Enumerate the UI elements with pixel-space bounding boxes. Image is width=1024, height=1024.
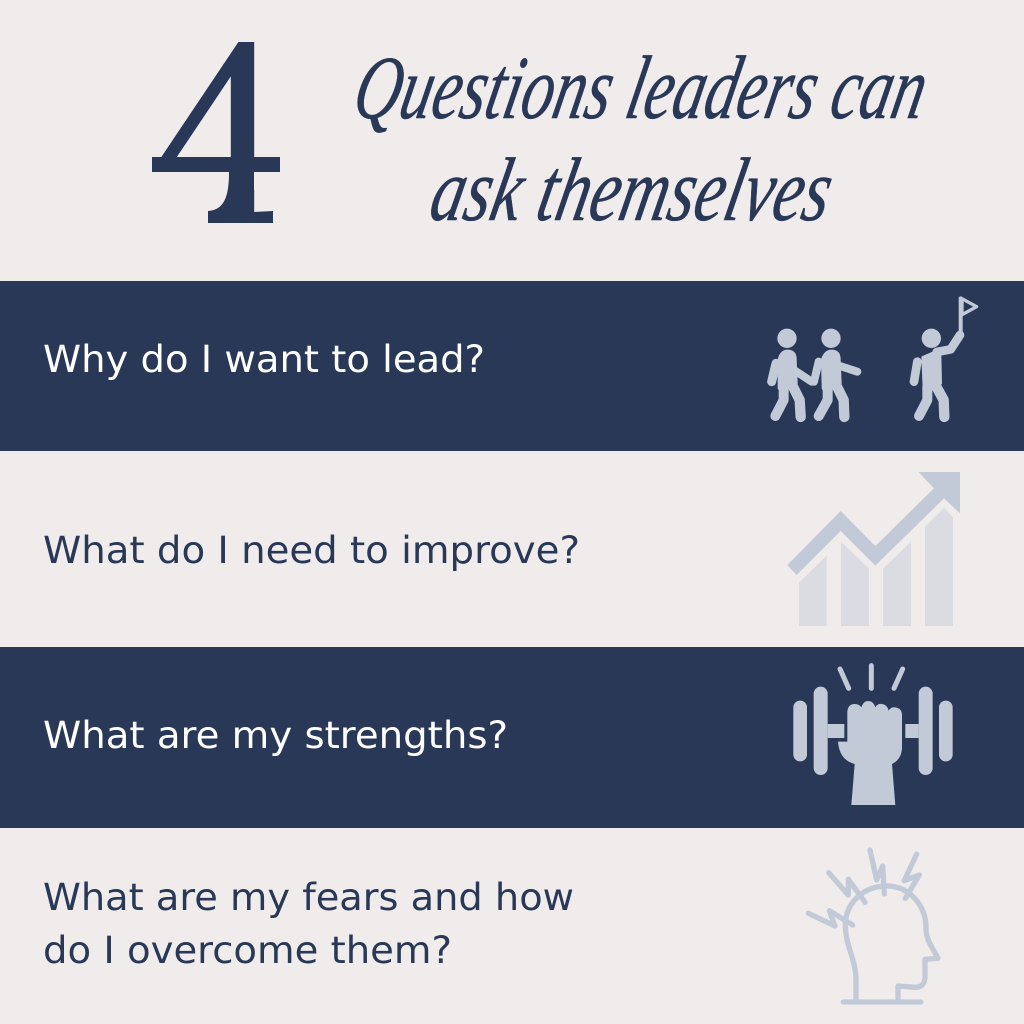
icon: fist gripping dumbbell — [793, 666, 953, 805]
title: Questions leaders can — [346, 38, 937, 139]
panel: improve — [43, 472, 960, 626]
question: improve: What do I need to improve? — [43, 529, 580, 572]
question: fears: do I overcome them? — [43, 929, 452, 972]
icon: rising bar chart with arrow — [787, 472, 960, 626]
panel: why lead — [0, 281, 1024, 451]
question: strengths: What are my strengths? — [43, 714, 508, 757]
panel: fears — [43, 850, 938, 1002]
question: fears — [43, 876, 574, 972]
icon: head with lightning bolts — [808, 850, 938, 1002]
title — [346, 38, 937, 241]
icon: people following leader with flag — [772, 298, 977, 417]
panel: strengths — [0, 647, 1024, 828]
title: ask themselves — [423, 140, 842, 241]
question: why lead: Why do I want to lead? — [43, 338, 485, 381]
question: fears: What are my fears and how — [43, 876, 574, 919]
